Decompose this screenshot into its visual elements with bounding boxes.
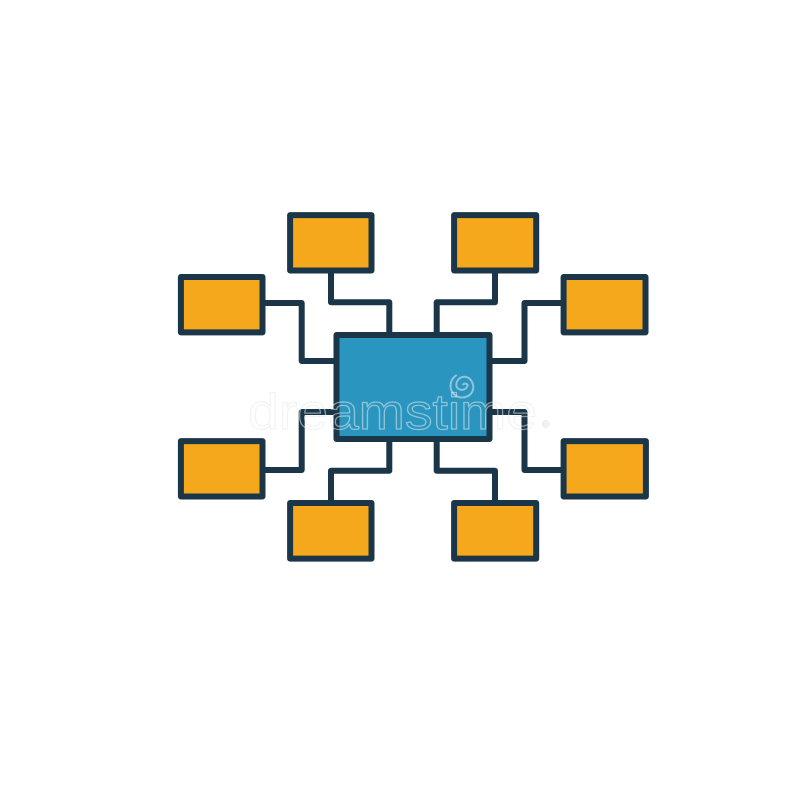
node: lower far right: [564, 441, 646, 496]
connector: lower far left: [264, 412, 335, 470]
connector: upper far right: [491, 303, 562, 361]
watermark: [248, 375, 549, 440]
watermark dot: [542, 420, 549, 428]
node: upper far right: [564, 277, 646, 332]
connector: upper far left: [264, 303, 335, 361]
watermark spiral: [451, 375, 473, 398]
diagram: hub and spoke network: [181, 215, 646, 559]
watermark text: dreamstime: [248, 384, 537, 440]
node: lower far left: [181, 441, 262, 496]
node: top left: [290, 215, 372, 270]
node: upper far left: [181, 277, 262, 332]
node: top right: [454, 215, 536, 270]
connector: top right: [437, 272, 495, 334]
central node: [336, 335, 490, 439]
connector: lower far right: [491, 412, 562, 470]
connector: top left: [331, 272, 389, 334]
node: bottom left: [290, 503, 372, 559]
node: bottom right: [454, 503, 536, 559]
connector: bottom right: [437, 440, 495, 501]
connector: bottom left: [331, 440, 389, 501]
